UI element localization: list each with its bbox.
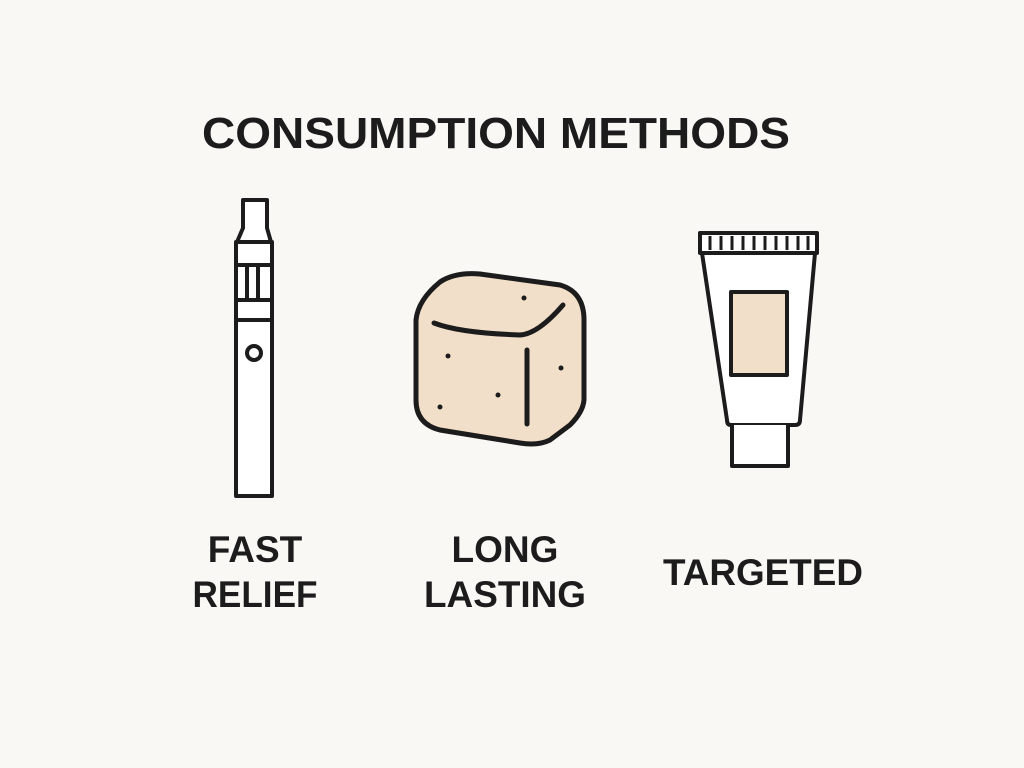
icon: cream tube xyxy=(700,233,817,466)
title: CONSUMPTION METHODS xyxy=(202,109,790,158)
label: targeted: TARGETED xyxy=(663,552,863,593)
label: long lasting: LASTING xyxy=(424,574,586,615)
icon: gummy cube xyxy=(416,274,584,444)
label: fast relief: RELIEF xyxy=(192,574,318,615)
label: fast relief xyxy=(192,529,318,615)
icon: vape pen xyxy=(236,200,272,496)
label: long lasting: LONG xyxy=(452,529,558,570)
label: long lasting xyxy=(424,529,586,615)
label: fast relief: FAST xyxy=(208,529,303,570)
